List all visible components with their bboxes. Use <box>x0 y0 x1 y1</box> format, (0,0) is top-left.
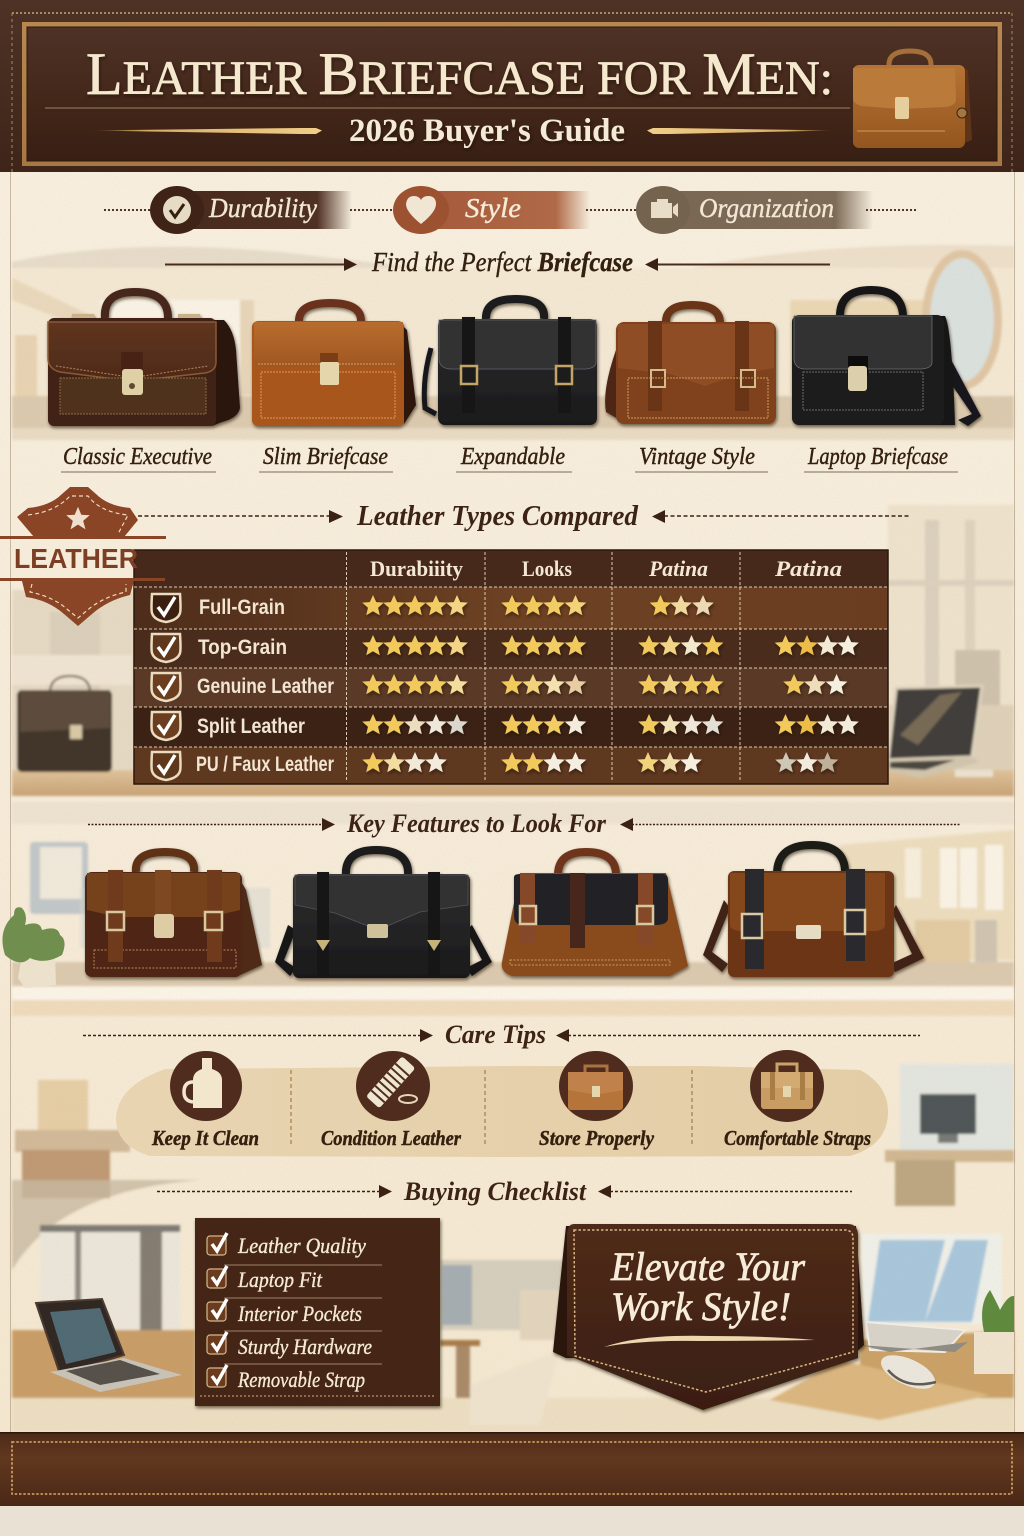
desk mouse <box>876 1348 940 1396</box>
table header labels: Patina <box>648 556 708 581</box>
item: removable strap: Removable Strap <box>237 1367 365 1392</box>
care: comfortable straps <box>724 1050 871 1150</box>
scene: features section office <box>12 802 1014 1016</box>
table rows background <box>134 550 888 784</box>
table header labels: Durabiiity <box>370 556 463 581</box>
potted plant right <box>974 1290 1014 1374</box>
label: vintage style: Vintage Style <box>639 444 755 470</box>
bag: expandable <box>424 299 597 425</box>
callout badge <box>553 1224 864 1410</box>
care: condition leather <box>321 1051 462 1150</box>
label: expandable: Expandable <box>460 444 565 470</box>
bag: two-tone satchel <box>502 852 688 976</box>
laptop on left desk <box>36 1299 182 1392</box>
pill: durability <box>150 186 352 234</box>
header frame <box>22 22 1002 166</box>
bag: brown laptop with black straps <box>703 845 924 977</box>
row: split leather <box>152 712 859 740</box>
subtitle ornament right <box>647 128 835 134</box>
care tips band <box>116 1050 888 1157</box>
row: top-grain: Top-Grain <box>198 636 287 659</box>
table header labels: Patina <box>774 556 842 581</box>
bag labels row one <box>61 444 958 472</box>
leather badge <box>0 487 166 626</box>
item: sturdy hardware <box>207 1332 372 1359</box>
item: interior pockets <box>207 1299 362 1326</box>
briefcases row one <box>48 290 981 426</box>
item: laptop fit: Laptop Fit <box>237 1267 323 1292</box>
row: pu faux leather: PU / Faux Leather <box>196 753 334 776</box>
row: genuine leather: Genuine Leather <box>197 675 334 698</box>
care: store properly <box>539 1051 655 1150</box>
band background <box>116 1066 888 1157</box>
row: pu faux leather <box>152 752 838 780</box>
heading: leather types compared <box>138 501 910 532</box>
callout swoosh <box>604 1336 815 1347</box>
row: top-grain <box>152 634 859 662</box>
table header labels: Looks <box>522 556 572 581</box>
bag: laptop briefcase <box>792 290 981 426</box>
subtitle: 2026 Buyer's Guide <box>349 113 625 149</box>
item: leather quality: Leather Quality <box>237 1233 366 1258</box>
item: laptop fit <box>207 1266 323 1292</box>
scene: care section office <box>15 1064 1014 1206</box>
footer band <box>0 1432 1024 1506</box>
comparison table <box>134 550 888 784</box>
potted plant left <box>2 907 65 988</box>
pills row <box>104 186 918 234</box>
heading: find the perfect briefcase <box>165 247 830 277</box>
heading: key features: Key Features to Look For <box>346 809 607 838</box>
subtitle ornament left <box>90 128 322 134</box>
scene: table section office <box>12 505 1014 796</box>
bag: vintage style <box>605 305 776 424</box>
care: comfortable straps: Comfortable Straps <box>724 1126 871 1150</box>
heading: care tips <box>83 1020 920 1049</box>
heading: leather types compared: Leather Types Compared <box>356 501 639 532</box>
care: condition leather: Condition Leather <box>321 1126 462 1150</box>
title: LEATHER BRIEFCASE FOR MEN: <box>86 41 833 107</box>
pill: organization <box>636 186 873 234</box>
bag: strapped brown <box>85 852 262 977</box>
scene: first section office <box>12 245 1014 440</box>
pill: organization: Organization <box>699 193 834 223</box>
bag: slim briefcase <box>252 303 416 426</box>
briefcases row two <box>85 845 924 978</box>
laptop on right desk <box>860 1322 968 1352</box>
care: store properly: Store Properly <box>539 1126 655 1150</box>
callout text: Elevate Your <box>610 1244 805 1289</box>
background laptop <box>886 686 993 778</box>
heading: find the perfect briefcase: Find the Perfect Briefcase <box>371 247 633 277</box>
row: genuine leather <box>152 673 847 701</box>
item: sturdy hardware: Sturdy Hardware <box>238 1334 372 1359</box>
heading: buying checklist: Buying Checklist <box>403 1177 587 1206</box>
label: laptop briefcase: Laptop Briefcase <box>807 444 948 470</box>
label: classic executive: Classic Executive <box>63 444 212 470</box>
header band <box>0 0 1024 172</box>
pill: durability: Durability <box>208 193 317 223</box>
row: full-grain: Full-Grain <box>199 596 285 619</box>
item: removable strap <box>207 1365 365 1392</box>
bag: classic executive <box>48 292 240 426</box>
row: full-grain <box>152 594 714 622</box>
care: keep it clean: Keep It Clean <box>151 1126 259 1150</box>
pill: style <box>393 186 590 234</box>
care: keep it clean <box>151 1051 259 1150</box>
item: interior pockets: Interior Pockets <box>237 1301 362 1326</box>
badge bottom <box>0 578 165 626</box>
scene: checklist section office <box>12 1180 1014 1432</box>
heading: key features <box>88 809 960 838</box>
heading: care tips: Care Tips <box>445 1020 546 1049</box>
lower margin <box>0 1506 1024 1536</box>
background bag <box>17 676 112 772</box>
row: split leather: Split Leather <box>197 715 305 738</box>
icon: header briefcase <box>853 51 972 148</box>
badge lettering: LEATHER <box>14 543 138 574</box>
table header labels <box>370 556 842 581</box>
pill: style: Style <box>465 193 521 223</box>
callout badge: Work Style! <box>611 1284 791 1329</box>
checklist panel <box>195 1218 440 1406</box>
bag: black messenger <box>275 850 492 978</box>
badge top <box>0 487 166 539</box>
label: slim briefcase: Slim Briefcase <box>263 444 388 470</box>
heading: buying checklist <box>157 1177 852 1206</box>
